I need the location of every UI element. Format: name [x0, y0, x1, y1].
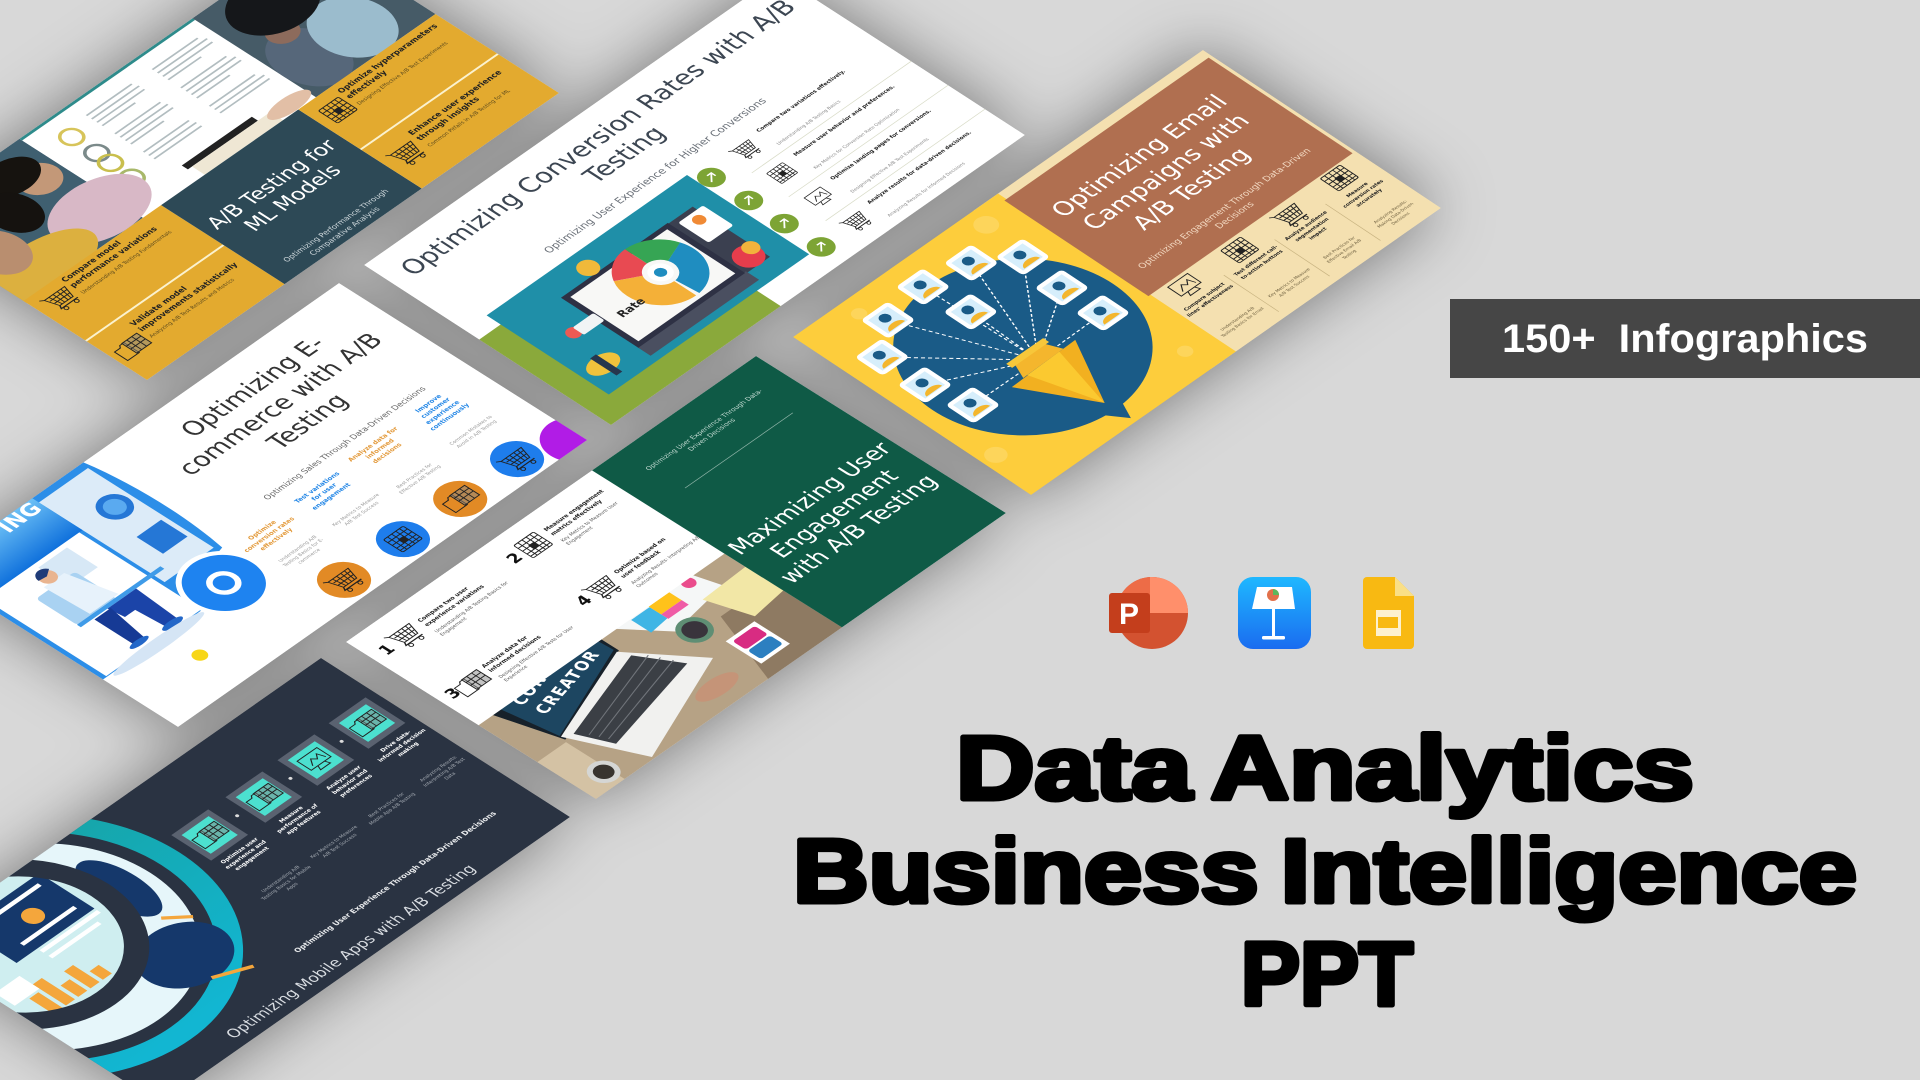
- cream items: Measure: [1345, 181, 1371, 199]
- cream items: impact: [1308, 226, 1329, 241]
- item list: Compare two variations effectively.: [756, 69, 847, 133]
- cream items: lines' effectiveness: [1186, 284, 1235, 318]
- columns: conversion rates: [242, 516, 297, 554]
- cream items: accurately: [1355, 187, 1385, 208]
- column labels: Analyze user: [325, 765, 363, 791]
- slide title: Testing: [259, 389, 355, 454]
- brown title panel: Optimizing Engagement Through Data-Driven: [1136, 147, 1314, 271]
- slide title: commerce with A/B: [171, 328, 389, 480]
- columns: Test variations: [292, 470, 342, 505]
- column notes: Understanding A/B: [260, 865, 302, 894]
- list items: 3: [440, 685, 466, 702]
- item list: Optimize landing pages for conversions.: [829, 109, 933, 181]
- cream items: conversion rates: [1342, 179, 1385, 209]
- title: [793, 719, 1857, 1025]
- illustration: green band and teal panel: Rate: [613, 295, 649, 320]
- brown title panel: Campaigns with: [1076, 109, 1256, 234]
- title: PPT: [1241, 925, 1413, 1025]
- green title panel: with A/B Testing: [774, 471, 944, 588]
- column labels: making: [397, 741, 421, 758]
- big blue circle badge: [176, 551, 266, 611]
- list items: [346, 463, 735, 725]
- column notes: A/B Test Success: [321, 833, 359, 859]
- green title panel: Driven Decisions: [686, 417, 738, 452]
- item list: Measure user behavior and preferences.: [792, 85, 897, 157]
- green title panel: [592, 356, 1006, 627]
- columns: Best Practices for: [395, 463, 434, 490]
- columns: customer: [419, 396, 453, 420]
- slide: A/B Testing for ML Models: [0, 0, 559, 393]
- icon squares: [170, 697, 407, 861]
- column labels: informed decision: [377, 728, 428, 763]
- list items: Engagement: [565, 526, 595, 546]
- ring illustration: [0, 819, 254, 1073]
- brown title panel: [1004, 58, 1353, 296]
- column labels: preferences: [339, 773, 375, 798]
- columns: decisions: [370, 441, 404, 465]
- title: Data Analytics: [956, 719, 1694, 819]
- green title panel: Maximizing User: [723, 438, 898, 559]
- columns: [244, 395, 544, 598]
- columns: A/B Test Success: [343, 500, 381, 527]
- brown title panel: A/B Testing: [1126, 143, 1257, 234]
- cream items: [1167, 165, 1414, 337]
- columns: Testing Basics for E-: [281, 537, 326, 569]
- item list: Analyzing Results for Informed Decisions: [886, 161, 968, 218]
- yellow panel: right items: Common Pitfalls in A/B Testing for ML: [427, 89, 512, 148]
- subtitle: Optimizing User Experience for Higher Conversions: [541, 96, 770, 256]
- list items: Analyzing Results: Interpreting A/B Test: [630, 529, 712, 585]
- yellow panel: left items: [23, 205, 285, 380]
- cream items: Decisions: [1390, 211, 1412, 226]
- column labels: Measure: [278, 806, 305, 824]
- cream items: Making Data-Driven: [1376, 201, 1416, 229]
- slide: Optimizing Email Campaigns: [790, 48, 1441, 495]
- yellow dot: [191, 650, 208, 661]
- columns: Understanding A/B: [277, 535, 319, 564]
- yellow panel: right items: Designing Effective A/B Test Experiments: [356, 41, 450, 106]
- list items: Understanding A/B Testing Basics for: [433, 581, 510, 634]
- photo: desk with laptop: CONTENT: [507, 637, 583, 708]
- badge: 150+ Infographics: 150+ Infographics: [1502, 317, 1868, 361]
- blue illustration: [0, 462, 222, 680]
- yellow panel: left items: improvements statistically: [136, 261, 240, 333]
- slide: Optimizing Conversion Rates: [364, 0, 1025, 425]
- list items: 1: [374, 641, 400, 658]
- illustration: green band and teal panel: [479, 175, 810, 425]
- list items: Optimize based on: [613, 537, 668, 575]
- yellow panel: left items: Compare model: [59, 239, 123, 284]
- column labels: experience and: [224, 840, 268, 870]
- arrow buttons: [696, 168, 836, 257]
- list items: Measure engagement: [543, 489, 606, 533]
- item list: Analyze results for data-driven decisions.: [866, 130, 973, 205]
- columns: Effective A/B Testing: [398, 464, 443, 495]
- yellow panel: left items: Understanding A/B Testing Fundamentals: [80, 230, 174, 295]
- icon: PowerPoint: [1109, 577, 1188, 649]
- slide title: Optimizing Conversion Rates with A/B: [394, 0, 802, 280]
- columns: experience: [423, 399, 462, 426]
- columns: continuously: [428, 401, 472, 432]
- column notes: Best Practices for: [367, 792, 406, 819]
- column labels: behavior and: [331, 769, 370, 795]
- columns: informed: [363, 437, 397, 460]
- green title panel: Engagement: [765, 466, 905, 562]
- columns: Analyze data for: [346, 425, 401, 463]
- slide title: Testing: [576, 122, 672, 188]
- column notes: Apps: [285, 881, 300, 892]
- list items: Designing Effective A/B Tests for User: [497, 625, 576, 680]
- column notes: Mobile App A/B Testing: [368, 792, 417, 826]
- column labels: app features: [285, 810, 323, 836]
- list items: Experience: [503, 664, 530, 683]
- navy title panel: Optimizing Performance Through: [281, 187, 391, 264]
- cream items: Analyzing Results:: [1372, 199, 1409, 225]
- columns: Optimize: [246, 519, 279, 541]
- item list: Understanding A/B Testing Basics: [775, 99, 843, 146]
- list items: Compare two user: [417, 587, 471, 624]
- photo: two men at a whiteboard: [0, 0, 445, 320]
- photo: desk with laptop: CREATOR: [530, 647, 605, 717]
- yellow panel: right items: through insights: [414, 95, 482, 142]
- list items: Outcomes: [635, 571, 660, 589]
- title: Business Intelligence: [793, 822, 1857, 922]
- slide: Maximizing User Engagement: [346, 356, 1006, 799]
- column labels: [220, 729, 426, 870]
- icon: Google Slides: [1363, 577, 1414, 649]
- cream items: A/B Test Success: [1278, 274, 1312, 298]
- slide title: Optimizing Mobile Apps with A/B Testing: [222, 862, 480, 1041]
- item list: Designing Effective A/B Test Experiments: [849, 137, 931, 194]
- cream items: Testing Basics for Email: [1219, 306, 1266, 339]
- navy title panel: [161, 110, 422, 284]
- yellow panel: left items: performance variations: [68, 225, 160, 289]
- list items: user feedback: [620, 549, 664, 579]
- purple corner shape: [540, 420, 587, 460]
- list items: Analyze data for: [481, 635, 530, 669]
- brown title panel: Decisions: [1213, 200, 1257, 231]
- columns: Key Metrics to Measure: [331, 493, 381, 528]
- cream items: Key Metrics to Measure: [1267, 267, 1312, 299]
- cream items: to-action buttons: [1240, 249, 1285, 281]
- yellow panel: right items: [298, 14, 559, 189]
- column notes: Key Metrics to Measure: [309, 825, 359, 860]
- list items: experience variations: [424, 584, 487, 628]
- columns: Common Mistakes to: [448, 415, 494, 446]
- yellow panel: left items: Analyzing A/B Test Results and Metrics: [148, 278, 237, 339]
- yellow panel: right items: Optimize hyperparameters: [335, 22, 440, 95]
- column labels: engagement: [234, 846, 271, 872]
- cream items: Testing: [1340, 249, 1358, 261]
- subtitle: Optimizing User Experience Through Data-Driven Decisions: [292, 809, 499, 954]
- brown title panel: Optimizing Email: [1045, 90, 1234, 222]
- column notes: [260, 756, 466, 900]
- icon: PowerPoint: P: [1119, 598, 1139, 631]
- navy title panel: A/B Testing for: [201, 135, 342, 233]
- badge: 150+ Infographics: [1450, 299, 1920, 378]
- columns: for user: [309, 481, 340, 502]
- yellow illustration panel: [793, 194, 1236, 495]
- list items: Key Metrics to Measure User: [560, 501, 620, 543]
- cream items: Effective Email A/B: [1326, 238, 1364, 264]
- column notes: Analyzing Results:: [418, 755, 459, 783]
- columns: Improve: [413, 393, 444, 414]
- slide: Optimizing Mobile Apps: [0, 617, 570, 1080]
- green title panel: Optimizing User Experience Through Data-: [644, 388, 765, 472]
- cream items: Analyze audience: [1284, 210, 1330, 242]
- cream items: segmentation: [1294, 217, 1331, 243]
- navy title panel: Comparative Analysis: [307, 205, 382, 257]
- cream items: Compare subject: [1183, 282, 1227, 312]
- column notes: Interpreting A/B Test: [422, 757, 467, 788]
- item list: [728, 61, 985, 230]
- item list: Key Metrics for Conversion Rate Optimization: [812, 108, 902, 170]
- photo: desk with laptop: [457, 540, 842, 799]
- list items: 2: [502, 550, 527, 567]
- yellow panel: right items: effectively: [344, 68, 390, 100]
- columns: effectively: [258, 526, 295, 552]
- yellow panel: left items: Validate model: [128, 285, 190, 327]
- yellow panel: right items: Enhance user experience: [406, 69, 504, 137]
- column labels: Optimize user: [220, 837, 260, 865]
- column notes: Data: [443, 771, 458, 781]
- list items: metrics effectively: [550, 499, 604, 537]
- column notes: Testing Basics for Mobile: [259, 865, 313, 902]
- illustration: seated man: [35, 566, 183, 649]
- slide drop shadows: [0, 0, 1441, 1080]
- columns: commerce: [297, 548, 322, 565]
- navy title panel: ML Models: [238, 161, 347, 235]
- list items: Engagement: [439, 617, 469, 637]
- cream items: Best Practices for: [1322, 235, 1357, 260]
- cream items: Test different call-: [1233, 245, 1280, 277]
- columns: engagement: [310, 482, 353, 511]
- slide title: Optimizing E-: [174, 332, 332, 441]
- cream items: Understanding A/B: [1219, 306, 1257, 332]
- columns: Avoid in A/B Testing: [455, 419, 499, 449]
- column labels: Drive data-: [380, 730, 414, 753]
- list items: 4: [571, 592, 597, 609]
- icon: Keynote: [1238, 577, 1311, 649]
- list items: informed decisions: [488, 635, 544, 673]
- slide: Optimizing E-commerce: [0, 283, 587, 727]
- column labels: performance of: [276, 803, 320, 834]
- subtitle: Optimizing Sales Through Data-Driven Decisions: [261, 385, 428, 502]
